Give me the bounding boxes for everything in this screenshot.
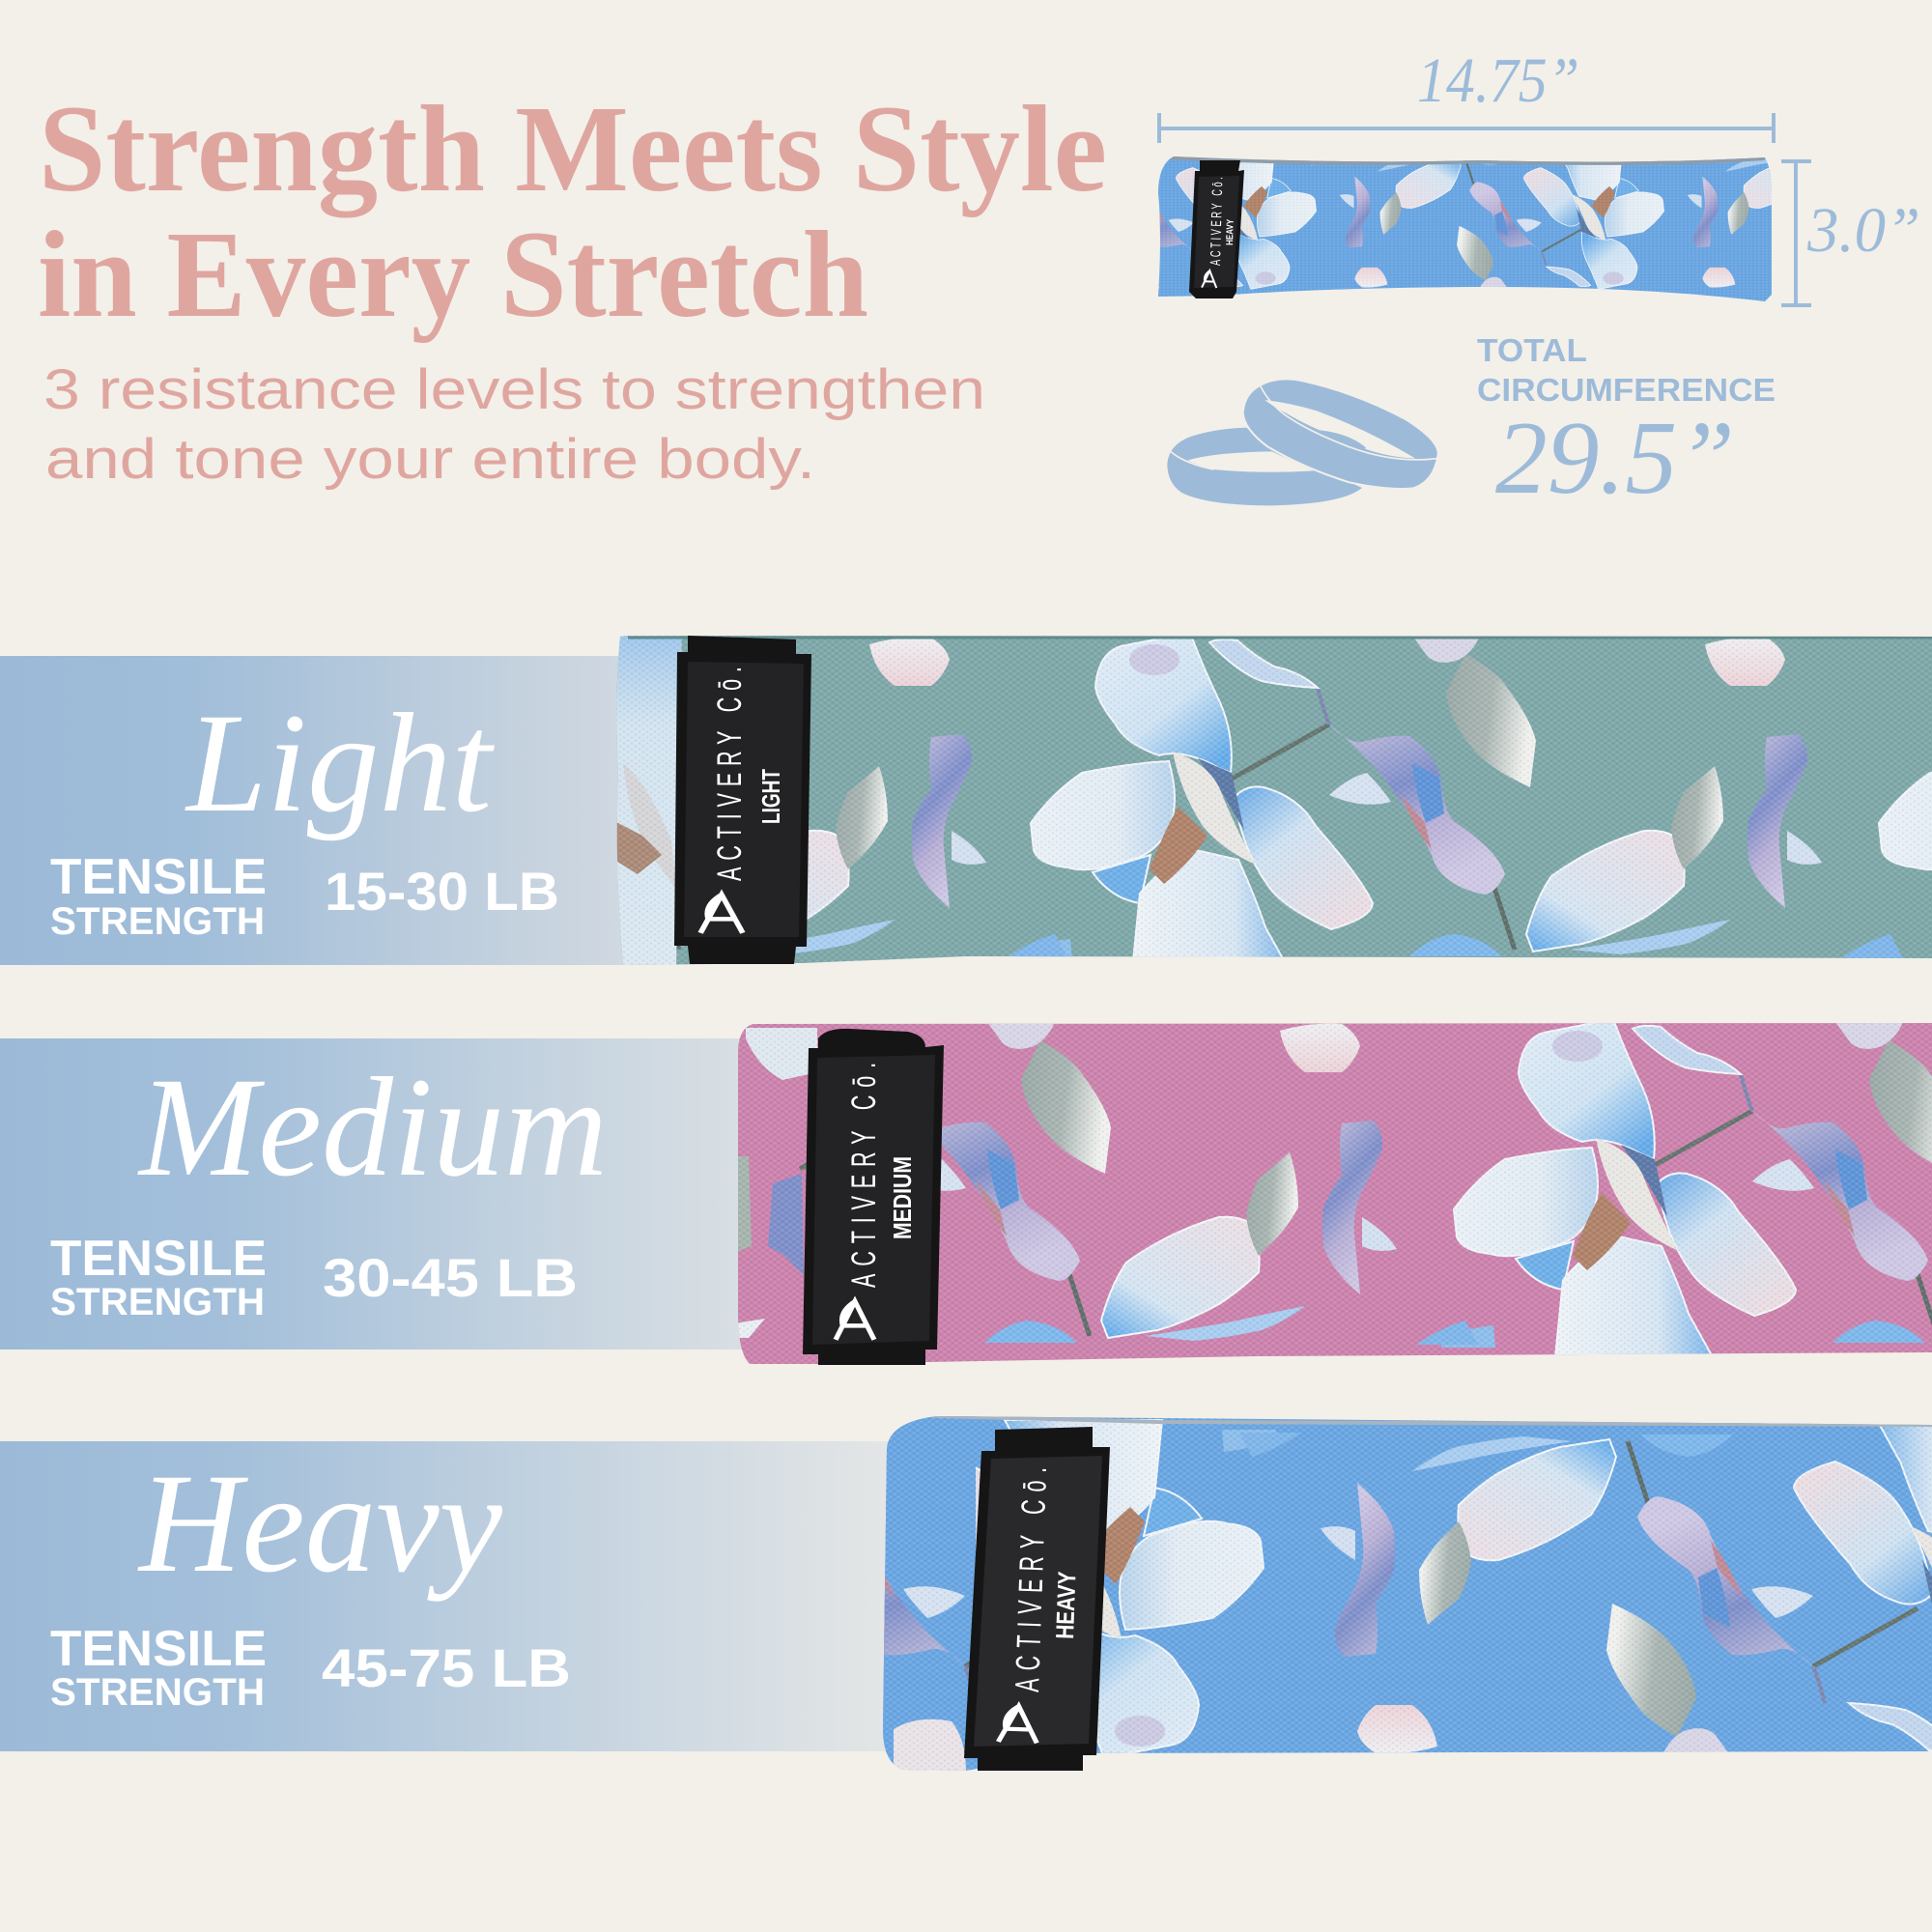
subtitle xyxy=(43,358,985,491)
light tag xyxy=(674,636,811,964)
title: in Every Stretch xyxy=(38,206,868,343)
heavy tensile label xyxy=(50,1621,267,1714)
heavy heading: Heavy xyxy=(137,1444,503,1602)
width label: 14.75” xyxy=(1417,45,1579,116)
small band photo xyxy=(1158,156,1772,301)
title: Strength Meets Style xyxy=(39,80,1107,217)
light band photo xyxy=(616,636,1932,965)
circumference text: CIRCUMFERENCE xyxy=(1477,372,1776,408)
light value: 15-30 LB xyxy=(325,861,559,922)
width arrow xyxy=(1159,113,1774,143)
medium heading: Medium xyxy=(137,1048,608,1206)
circumference text: 29.5” xyxy=(1495,401,1735,516)
medium tensile label xyxy=(50,1231,267,1323)
circumference text xyxy=(1477,332,1776,516)
medium band photo xyxy=(738,1023,1932,1364)
light heading: Light xyxy=(185,684,495,841)
light tensile label: STRENGTH xyxy=(50,900,265,943)
height label: 3.0” xyxy=(1806,195,1920,266)
medium tag: ACTIVERY Cō. xyxy=(846,1063,883,1288)
heavy value: 45-75 LB xyxy=(322,1637,571,1698)
small band photo: HEAVY xyxy=(1225,219,1236,245)
light tensile label xyxy=(50,849,267,943)
small band photo: ACTIVERY Cō. xyxy=(1208,177,1226,266)
medium tensile label: STRENGTH xyxy=(50,1281,265,1323)
heavy ribbon xyxy=(0,1441,894,1751)
heavy band photo xyxy=(883,1416,1932,1771)
medium tag: MEDIUM xyxy=(888,1156,917,1239)
heavy tensile label: TENSILE xyxy=(50,1621,267,1677)
heavy tensile label: STRENGTH xyxy=(50,1671,265,1714)
heavy tag xyxy=(964,1427,1110,1771)
medium value: 30-45 LB xyxy=(323,1247,578,1308)
icon: two rings xyxy=(1167,379,1438,505)
medium ribbon xyxy=(0,1038,744,1350)
panel: light band xyxy=(0,628,1932,971)
medium tag xyxy=(803,1029,944,1365)
heavy tag: ACTIVERY Cō. xyxy=(1009,1466,1055,1692)
circumference text: TOTAL xyxy=(1477,332,1587,368)
light ribbon xyxy=(0,656,623,965)
title xyxy=(38,80,1107,343)
height arrow xyxy=(1781,161,1811,305)
heavy tag: HEAVY xyxy=(1050,1571,1081,1639)
panel: heavy band xyxy=(0,1410,1932,1777)
subtitle: and tone your entire body. xyxy=(45,428,815,491)
panel: medium band xyxy=(0,1014,1932,1372)
medium tensile label: TENSILE xyxy=(50,1231,267,1287)
light tensile label: TENSILE xyxy=(50,849,267,905)
subtitle: 3 resistance levels to strengthen xyxy=(43,358,985,421)
light tag: LIGHT xyxy=(756,769,785,824)
panel: band dimensions xyxy=(1157,59,1918,307)
light tag: ACTIVERY Cō. xyxy=(712,667,749,881)
